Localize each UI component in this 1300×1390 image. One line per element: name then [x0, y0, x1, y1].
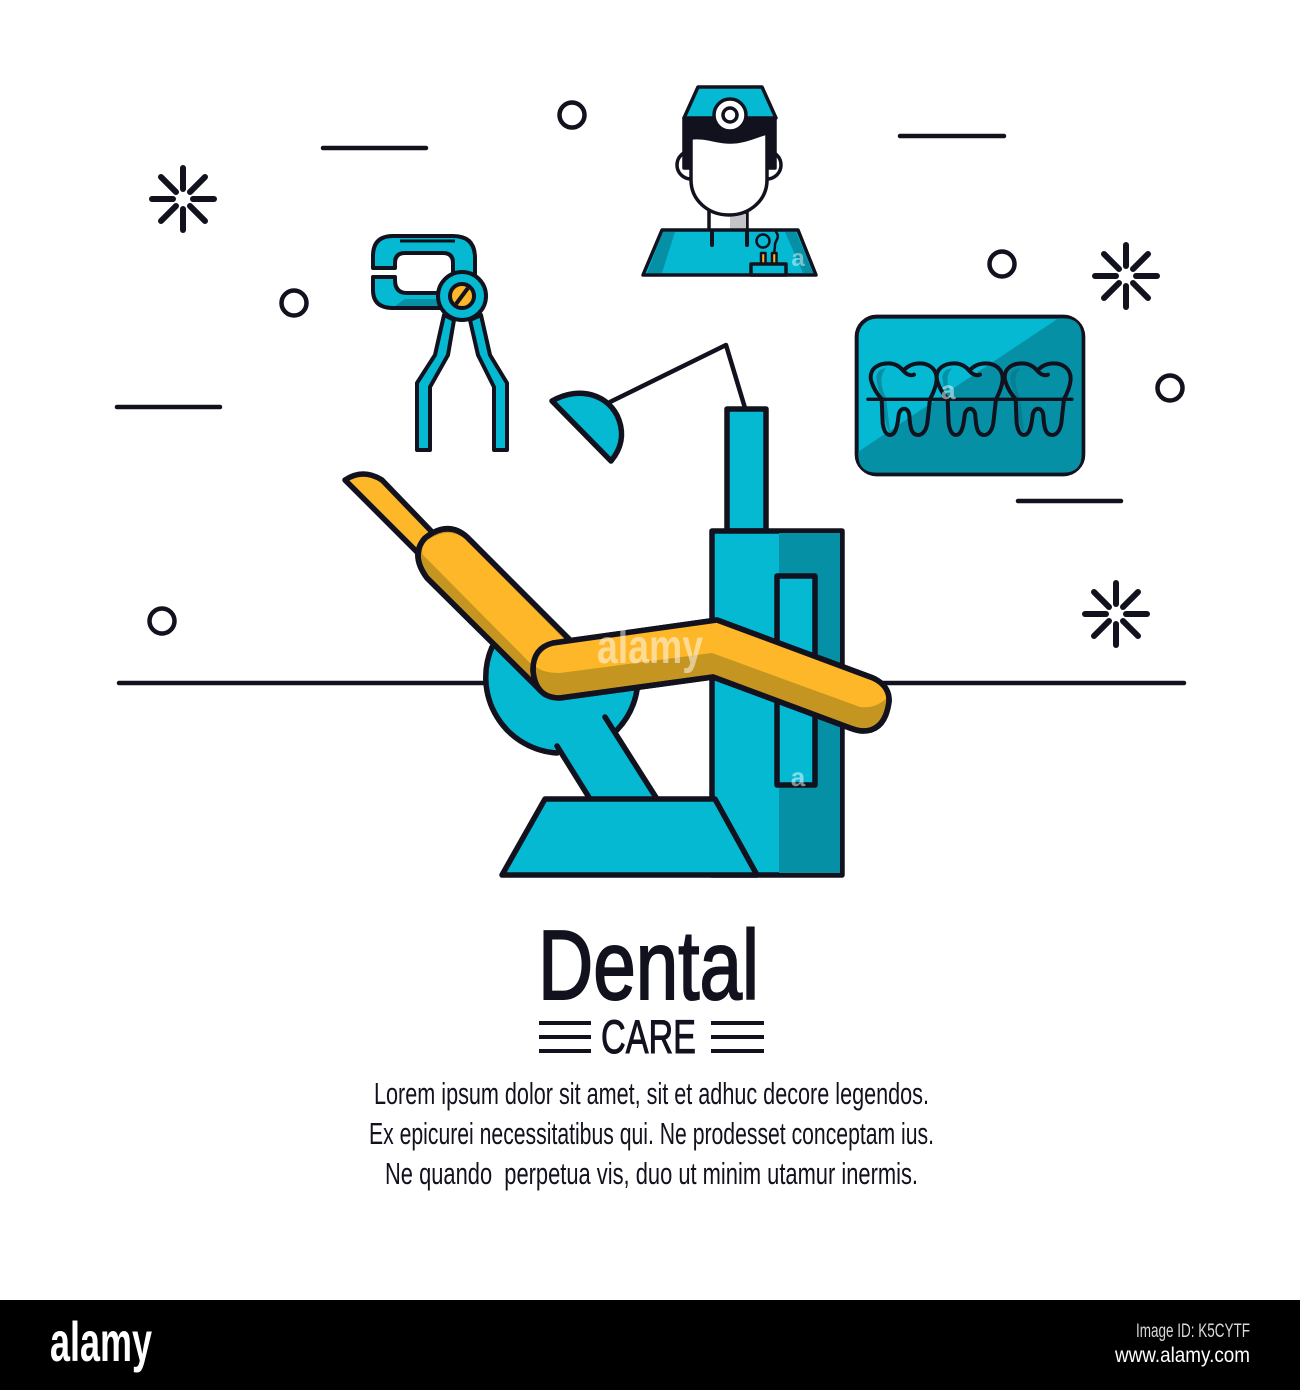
decorative marks: small circles [150, 102, 1182, 634]
x-ray background [857, 317, 1083, 474]
body text: Lorem ipsum dolor sit amet, sit et adhuc decore legendos. [374, 1076, 929, 1111]
body text: Ex epicurei necessitatibus qui. Ne prodesset conceptam ius. [369, 1116, 934, 1151]
lamp arm [610, 345, 745, 408]
pivot screw [450, 284, 474, 308]
body text [369, 1076, 934, 1191]
floor line [119, 681, 1184, 685]
gum line [868, 394, 1072, 404]
x-ray diagonal shade [858, 318, 1082, 473]
icon: dental chair [345, 345, 889, 875]
title: Dental: Dental [538, 910, 759, 1020]
subtitle: Care with rules [539, 1010, 764, 1063]
watermark letter on column: a [791, 762, 806, 792]
footer url: www.alamy.com [1114, 1344, 1250, 1367]
forceps shading [395, 299, 442, 306]
uniform shading [647, 232, 813, 273]
chair pivot disc [486, 647, 637, 753]
main column [712, 531, 842, 875]
body text: Ne quando perpetua vis, duo ut minim utamur inermis. [385, 1156, 918, 1191]
dentist neck [709, 205, 747, 232]
forceps pivot [438, 272, 486, 320]
chair support arm [557, 717, 657, 799]
dentist uniform [643, 230, 816, 275]
tooth three [1005, 363, 1071, 435]
icon: dental forceps [373, 236, 507, 450]
left rules [539, 1023, 591, 1051]
watermark letter on uniform: a [791, 245, 805, 272]
icon: sparkle lower right [1085, 583, 1147, 645]
watermark letter on x-ray: a [941, 375, 956, 405]
uniform pocket [751, 264, 786, 275]
uniform collar [712, 232, 747, 245]
lamp shade [552, 393, 622, 461]
dentist cap [684, 87, 776, 118]
column shading [779, 533, 840, 873]
column inset panel [777, 576, 815, 785]
right rules [711, 1023, 764, 1051]
icon: dentist [643, 87, 816, 275]
image id: Image ID: K5CYTF [1136, 1321, 1250, 1342]
icon: sparkle upper right [1095, 245, 1157, 307]
dentist face [691, 133, 767, 215]
headrest post [345, 474, 434, 553]
upper column [727, 409, 766, 531]
pocket tools [756, 232, 778, 265]
seat [533, 620, 889, 731]
forceps handles [417, 315, 507, 450]
tooth one [871, 363, 937, 435]
icon: dental x-ray panel [857, 317, 1083, 474]
icon: sparkle left [152, 168, 214, 230]
forceps jaw [373, 236, 475, 308]
hair band [684, 118, 775, 168]
watermark on chair: alamy [597, 621, 703, 674]
chair base [502, 799, 757, 875]
head mirror [714, 99, 746, 131]
jaw highlight [400, 240, 455, 242]
dentist ears [677, 151, 781, 179]
subtitle text: CARE [601, 1010, 696, 1063]
tooth two [937, 363, 1003, 435]
footer bar [0, 1300, 1300, 1390]
backrest [418, 529, 570, 690]
footer logo: alamy [50, 1310, 152, 1373]
decorative marks: short dashes [117, 136, 1121, 501]
dentist neck shadow [730, 214, 746, 230]
